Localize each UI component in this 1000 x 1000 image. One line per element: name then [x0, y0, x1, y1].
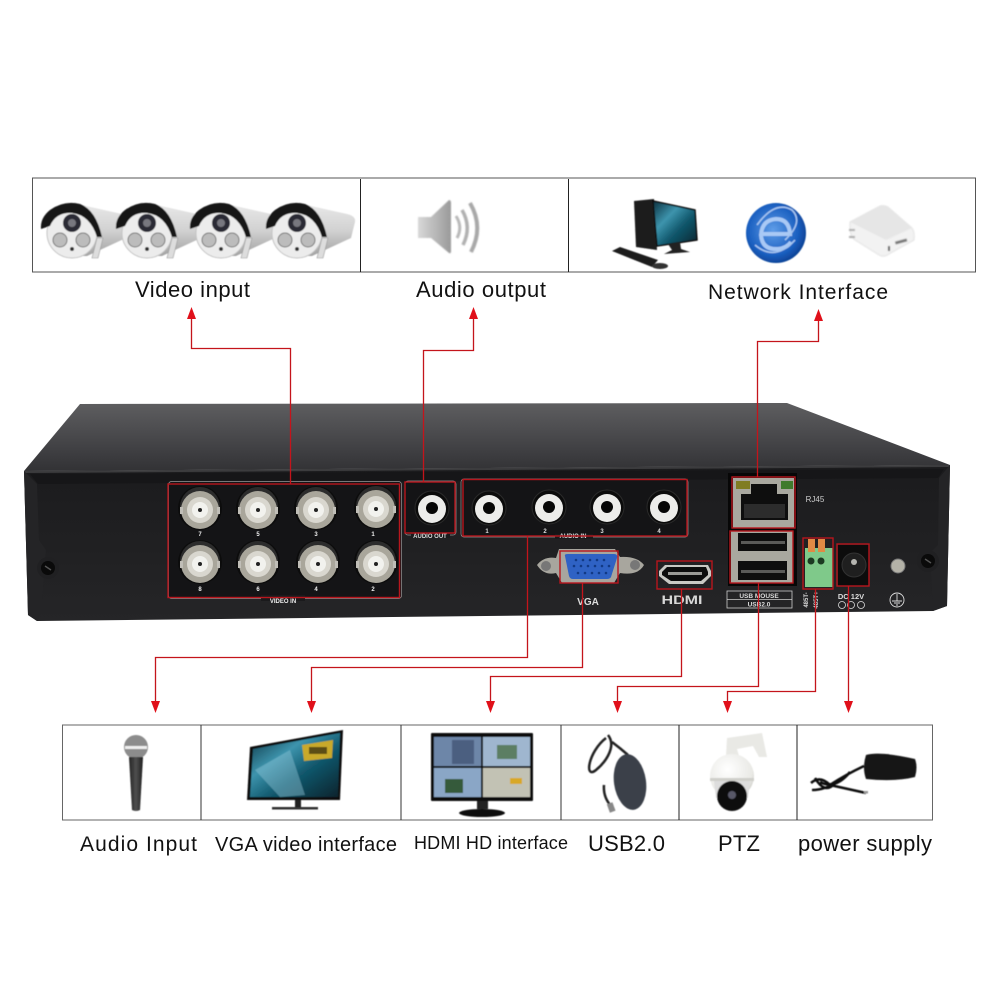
video channel numbers: 1 [371, 532, 375, 538]
audio labels: 2 [543, 529, 547, 535]
RS485 labels: 485T- [804, 592, 810, 608]
icon: internet globe [746, 203, 806, 263]
audio labels: AUDIO OUT [413, 534, 447, 540]
icon: VGA monitor [247, 730, 343, 810]
label: HDMI HD interface: HDMI HD interface [414, 833, 568, 853]
front face [24, 465, 950, 621]
panel: DVR recorder rear view [24, 403, 950, 621]
white group outlines [168, 482, 402, 598]
chassis screw left [37, 557, 59, 579]
ground screw [891, 559, 905, 573]
label: USB2.0: USB2.0 [588, 831, 665, 856]
icon: power adapter [811, 754, 916, 794]
DC label: DC 12V [838, 592, 864, 601]
arrow: power supply [844, 586, 853, 713]
video channel numbers: 3 [314, 532, 318, 538]
audio labels: 3 [600, 529, 604, 535]
icon: desktop computer [612, 199, 697, 269]
USB label box: USB2.0 [748, 602, 771, 608]
audio labels: 4 [657, 529, 661, 535]
video channel numbers [198, 532, 375, 605]
RS485 labels [804, 591, 820, 609]
ground symbol [890, 593, 904, 607]
panel: top device strip [32, 178, 976, 272]
label: Audio Input: Audio Input [80, 833, 197, 856]
VGA port [537, 549, 644, 583]
USB label box [727, 591, 792, 608]
chassis screw right [917, 550, 939, 572]
video channel numbers: 5 [256, 532, 260, 538]
arrow: PTZ [723, 589, 816, 713]
arrow: video input [187, 307, 290, 484]
RJ45 label: RJ45 [806, 495, 825, 504]
icon: HDMI monitor with surveillance view [431, 733, 533, 817]
VGA label: VGA [577, 597, 599, 608]
RJ45 and USB stack [728, 473, 797, 586]
icon: speaker [418, 200, 477, 253]
red port highlight boxes [168, 477, 869, 598]
USB label box: USB MOUSE [739, 593, 779, 600]
arrow: audio output [424, 307, 478, 482]
panel: bottom device strip [62, 725, 932, 820]
RS485 labels: 485T+ [814, 591, 820, 609]
video channel numbers: 8 [198, 587, 202, 593]
video channel numbers: 2 [371, 587, 375, 593]
heading: Audio output: Audio output [416, 277, 546, 302]
audio labels: AUDIO IN [560, 534, 586, 540]
icon: PTZ dome camera [710, 733, 767, 811]
video channel numbers: 4 [314, 587, 318, 593]
DC label [838, 592, 864, 608]
icon: four bullet cameras [41, 203, 355, 258]
arrow: VGA [307, 583, 582, 713]
RS485 green terminal [805, 539, 833, 587]
HDMI port [659, 565, 711, 584]
video channel numbers: VIDEO IN [270, 599, 296, 605]
arrow: audio input [151, 536, 528, 713]
audio labels: 1 [485, 529, 489, 535]
DC power jack [838, 545, 869, 586]
arrow: network interface [758, 309, 823, 477]
audio RCA connectors [415, 490, 681, 525]
label: PTZ: PTZ [718, 831, 760, 856]
icon: microphone [124, 735, 148, 811]
icon: wireless router [849, 206, 914, 256]
arrow: USB [613, 583, 758, 713]
video BNC connectors [178, 485, 398, 584]
top cover [24, 403, 950, 471]
heading: Video input: Video input [135, 277, 250, 302]
arrow: HDMI [486, 589, 682, 713]
icon: USB mouse [589, 735, 650, 813]
label: power supply: power supply [798, 831, 932, 856]
label: VGA video interface: VGA video interface [215, 834, 397, 856]
audio labels [411, 529, 661, 540]
video channel numbers: 7 [198, 532, 202, 538]
heading: Network Interface: Network Interface [708, 281, 888, 304]
video channel numbers: 6 [256, 587, 260, 593]
HDMI logo label: HDMI [662, 593, 702, 607]
